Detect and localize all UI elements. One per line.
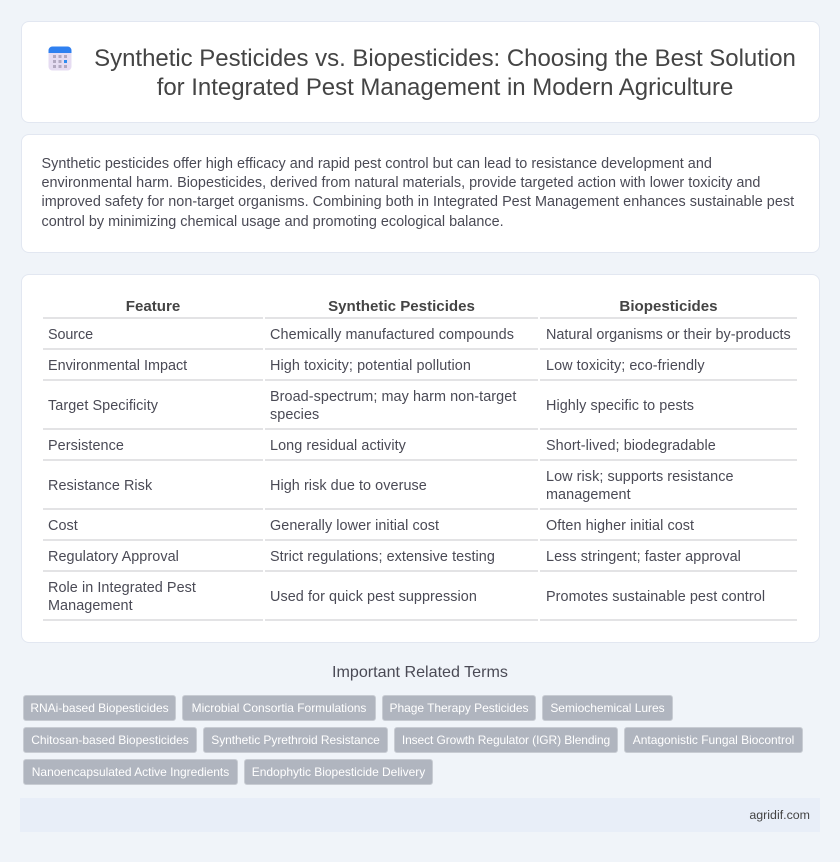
comparison table: Management (48, 598, 133, 614)
comparison table: Often higher initial cost (546, 518, 694, 534)
title (94, 45, 796, 101)
comparison table: management (546, 487, 631, 503)
comparison table: Persistence (48, 438, 124, 454)
comparison table: Role in Integrated Pest (48, 580, 196, 596)
related term tags: Insect Growth Regulator (IGR) Blending (402, 733, 610, 747)
comparison table: Synthetic Pesticides (328, 298, 475, 315)
comparison table: Environmental Impact (48, 358, 187, 374)
comparison table: Target Specificity (48, 398, 158, 414)
related term tags: Nanoencapsulated Active Ingredients (32, 765, 229, 779)
comparison table: Chemically manufactured compounds (270, 327, 514, 343)
comparison table: Feature (126, 298, 180, 315)
comparison table: Highly specific to pests (546, 398, 694, 414)
comparison table: Low risk; supports resistance (546, 469, 734, 485)
comparison table: Source (48, 327, 93, 343)
comparison table: Broad-spectrum; may harm non-target (270, 389, 516, 405)
related term tags: RNAi-based Biopesticides (30, 701, 169, 715)
intro text: improved safety for non-target organisms. Combining both in Integrated Pest Management enhances sustainable pest (42, 194, 794, 210)
intro text (42, 156, 794, 230)
icon: calendar (48, 46, 72, 70)
comparison table: Regulatory Approval (48, 549, 179, 565)
intro text: control by minimizing chemical usage and promoting ecological balance. (42, 214, 504, 230)
comparison table: Less stringent; faster approval (546, 549, 741, 565)
intro text: environmental harm. Biopesticides, derived from natural materials, provide targeted action with lower toxicity and (42, 175, 760, 191)
related term tags: Endophytic Biopesticide Delivery (252, 765, 425, 779)
related term tags: Synthetic Pyrethroid Resistance (211, 733, 380, 747)
comparison table: Promotes sustainable pest control (546, 589, 765, 605)
footer bar (20, 798, 820, 832)
comparison table: Natural organisms or their by-products (546, 327, 791, 343)
related terms heading: Important Related Terms (332, 663, 508, 681)
intro card (20, 134, 820, 252)
comparison table: Strict regulations; extensive testing (270, 549, 495, 565)
related term tags (23, 695, 803, 785)
related term tags: Antagonistic Fungal Biocontrol (633, 733, 794, 747)
header card (20, 20, 820, 122)
comparison table: High risk due to overuse (270, 478, 427, 494)
title: Synthetic Pesticides vs. Biopesticides: Choosing the Best Solution (94, 45, 796, 72)
footer source: agridif.com (749, 808, 810, 822)
comparison table: High toxicity; potential pollution (270, 358, 471, 374)
comparison table: Used for quick pest suppression (270, 589, 477, 605)
comparison table: Resistance Risk (48, 478, 152, 494)
comparison table card (20, 274, 820, 642)
comparison table: Low toxicity; eco-friendly (546, 358, 705, 374)
related term tags: Chitosan-based Biopesticides (31, 733, 189, 747)
comparison table: species (270, 407, 319, 423)
comparison table: Long residual activity (270, 438, 406, 454)
intro text: Synthetic pesticides offer high efficacy and rapid pest control but can lead to resistance development and (42, 156, 712, 172)
title: for Integrated Pest Management in Modern Agriculture (157, 74, 733, 101)
comparison table: Biopesticides (619, 298, 718, 315)
related term tags: Phage Therapy Pesticides (390, 701, 528, 715)
comparison table: Short-lived; biodegradable (546, 438, 716, 454)
related term tags: Semiochemical Lures (550, 701, 665, 715)
comparison table: Cost (48, 518, 78, 534)
comparison table: Generally lower initial cost (270, 518, 439, 534)
comparison table (43, 298, 797, 621)
related term tags: Microbial Consortia Formulations (192, 701, 366, 715)
